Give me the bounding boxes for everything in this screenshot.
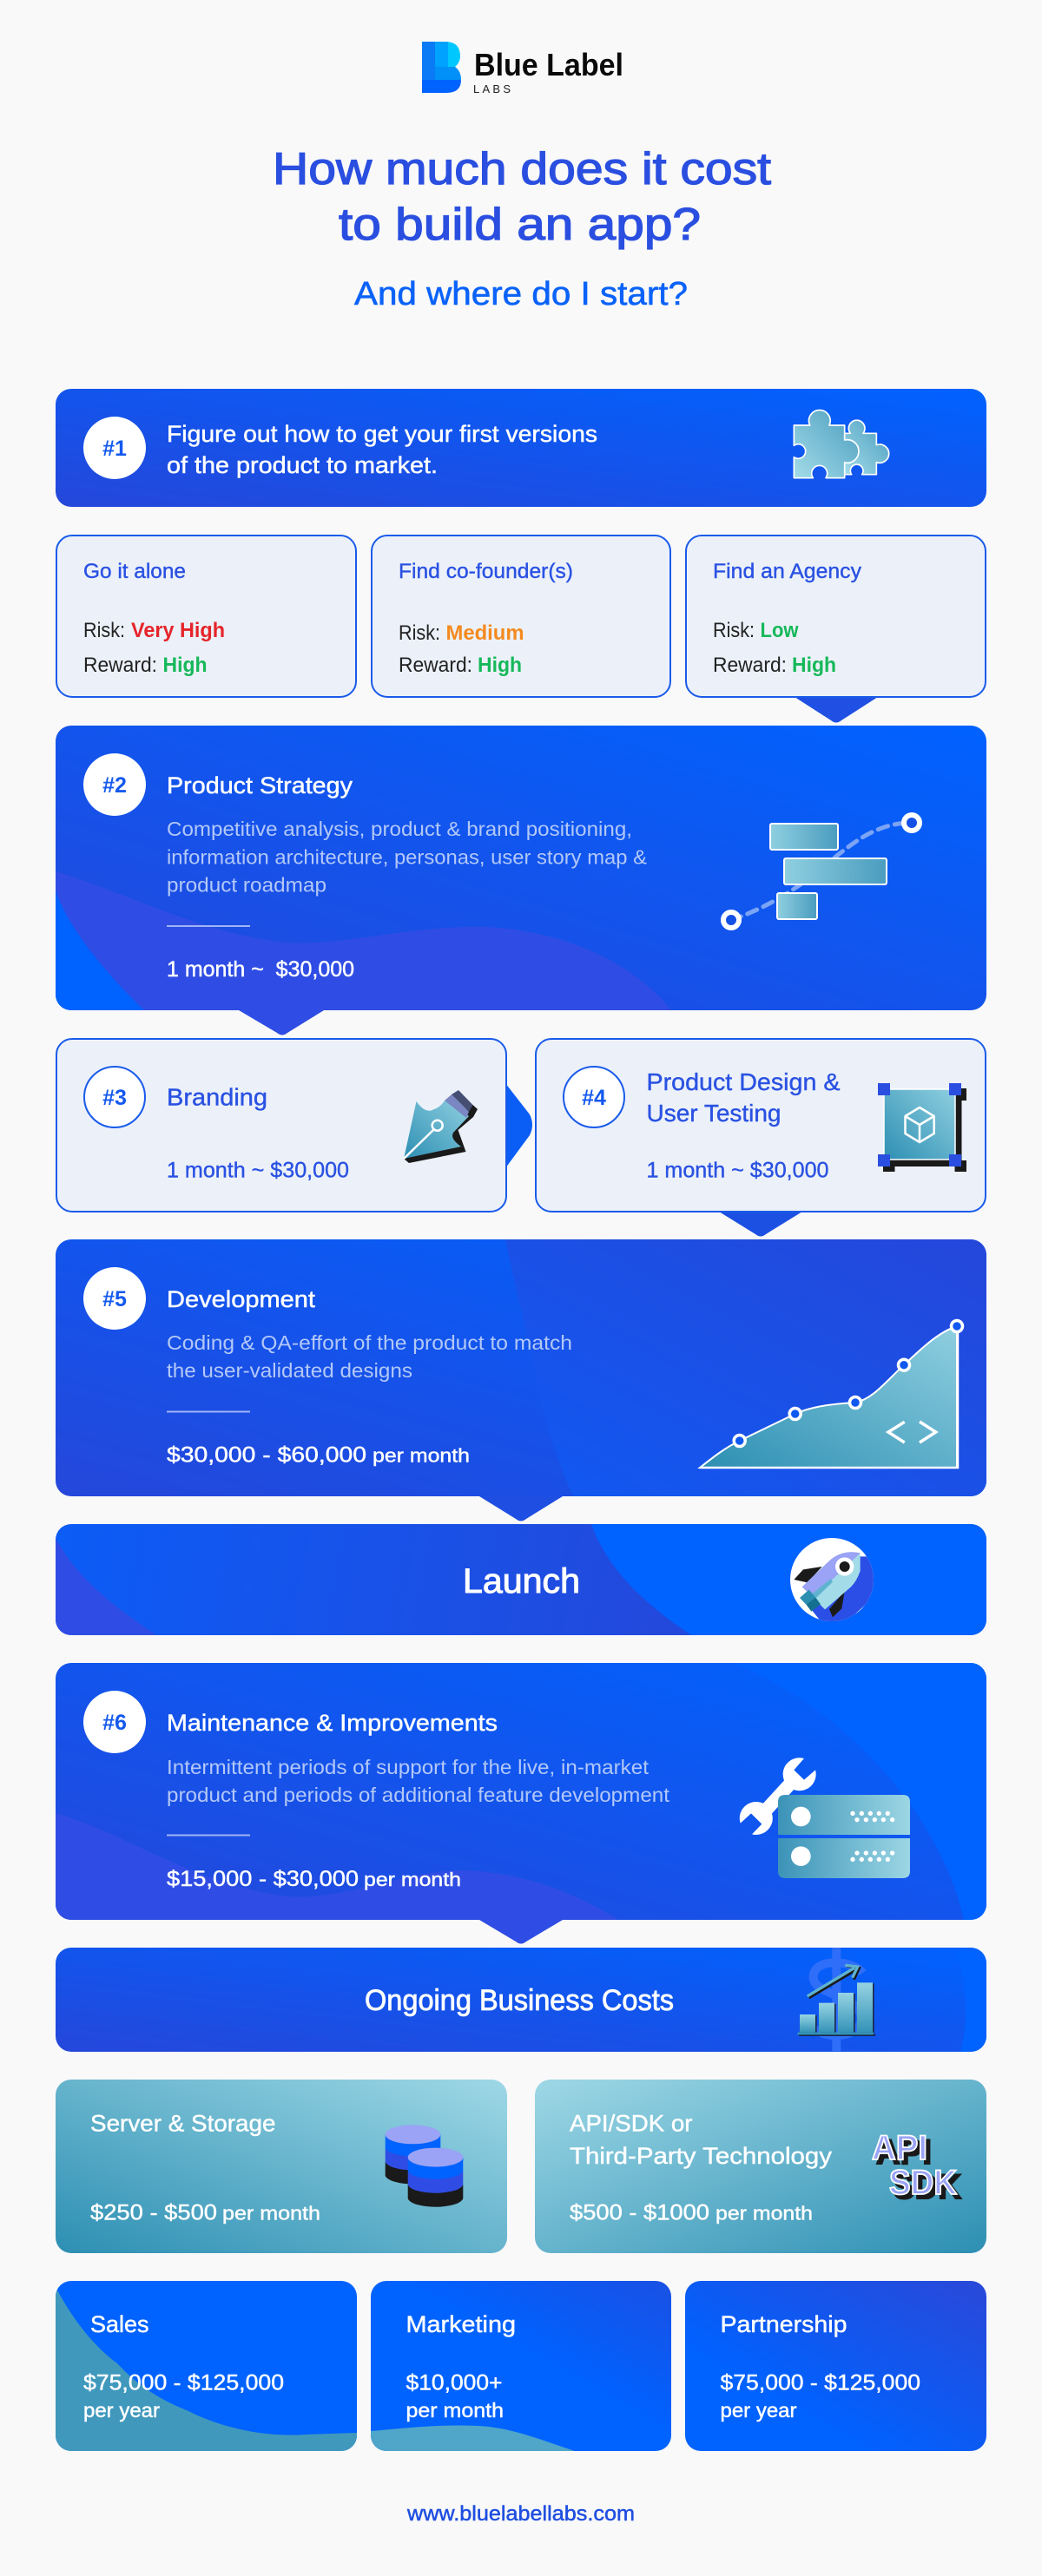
heading: sales: Sales — [90, 2311, 149, 2337]
text: price: $75,000 - $125,000 — [83, 2371, 284, 2395]
panel: partnership — [685, 2281, 986, 2451]
panel: find an agency: Reward: — [713, 654, 787, 677]
panel: find an agency: High — [792, 654, 836, 677]
panel: find co-founders: Reward: — [399, 654, 472, 677]
icon: pen nib — [404, 1090, 478, 1163]
text: price — [570, 2201, 813, 2225]
heading: API/SDK or third-party technology: Third-Party Technology — [570, 2143, 833, 2169]
text: description: product and periods of additional feature development — [167, 1784, 670, 1806]
text: price: per month — [406, 2399, 504, 2422]
footer url: www.bluelabellabs.com — [406, 2502, 635, 2526]
text: description: Coding & QA-effort of the product to match — [167, 1331, 572, 1354]
text: description — [167, 1331, 572, 1382]
heading: product design and user testing: Product Design & — [646, 1068, 841, 1095]
panel: step 1 — [56, 389, 986, 507]
icon: design artboard with cube — [878, 1083, 966, 1172]
icon: wrench and server — [740, 1758, 910, 1878]
heading: product strategy: Product Strategy — [167, 772, 353, 798]
text: price — [167, 1867, 461, 1891]
text: price — [90, 2201, 320, 2225]
panel: step 2 product strategy — [56, 726, 986, 1010]
badge: #5 — [83, 1267, 146, 1330]
title: How much does it cost — [273, 144, 772, 194]
icon: API SDK lettering: SDK — [894, 2168, 961, 2206]
badge: #1 — [83, 417, 146, 479]
heading: ongoing business costs: Ongoing Business Costs — [365, 1984, 674, 2017]
panel: go it alone: Go it alone — [83, 560, 186, 583]
panel: marketing — [371, 2281, 671, 2451]
title — [273, 144, 772, 250]
icon: API SDK lettering: SDK — [889, 2164, 957, 2202]
heading: product design and user testing — [646, 1068, 841, 1127]
panel: go it alone: Reward: — [83, 654, 157, 677]
text: price: $500 - $1000 — [570, 2201, 709, 2225]
panel: step 5 development — [56, 1239, 986, 1496]
text: price — [83, 2371, 284, 2422]
text: price — [406, 2371, 504, 2422]
panel: step 3 branding — [56, 1039, 506, 1212]
title: to build an app? — [339, 200, 701, 250]
panel: step 6 maintenance — [56, 1663, 986, 1920]
panel: sales — [56, 2281, 357, 2451]
badge: #4: #4 — [582, 1086, 606, 1110]
text: step 1: Figure out how to get your first versions — [167, 421, 597, 447]
text: price — [167, 1442, 470, 1467]
panel: launch — [56, 1524, 986, 1635]
heading: marketing: Marketing — [406, 2311, 516, 2337]
arrow: step 5 to launch — [479, 1496, 563, 1521]
text: step 1: of the product to market. — [167, 452, 438, 478]
text: price: 1 month ~ $30,000 — [167, 957, 354, 982]
text: price: $10,000+ — [406, 2371, 502, 2395]
heading: partnership: Partnership — [721, 2311, 847, 2337]
panel: step 4 product design — [536, 1039, 986, 1212]
text: price: per year — [83, 2399, 160, 2422]
text: description: product roadmap — [167, 873, 326, 896]
logo: Blue Label Labs — [422, 42, 623, 95]
heading: launch: Launch — [463, 1562, 580, 1600]
panel: find an agency: Low — [761, 619, 799, 642]
text: step 1 — [167, 421, 597, 478]
panel: go it alone: Risk: — [83, 619, 125, 642]
text: price: per month — [222, 2203, 320, 2224]
panel: ongoing business costs — [56, 1948, 986, 2052]
arrow: step 6 to ongoing costs — [479, 1920, 563, 1944]
text: description — [167, 818, 647, 896]
text: price: $15,000 - $30,000 — [167, 1867, 359, 1891]
text: price: per month — [364, 1869, 461, 1890]
text: description: the user-validated designs — [167, 1359, 412, 1382]
badge: #4 — [564, 1067, 624, 1127]
icon: API SDK lettering: API — [872, 2129, 927, 2167]
panel: find co-founders: High — [478, 654, 522, 677]
text: description: Intermittent periods of support for the live, in-market — [167, 1756, 650, 1778]
text: price: $250 - $500 — [90, 2201, 217, 2225]
icon: gantt roadmap — [723, 815, 920, 928]
badge: #3: #3 — [102, 1086, 127, 1110]
badge: #2 — [83, 753, 146, 816]
panel: find co-founders — [372, 536, 670, 697]
text: price: per year — [721, 2399, 797, 2422]
badge: #3 — [84, 1067, 145, 1127]
panel: find an agency: Risk: — [713, 619, 755, 642]
text: price: per month — [716, 2203, 813, 2224]
text: price — [721, 2371, 920, 2422]
badge: #1: #1 — [102, 437, 127, 461]
badge: #6: #6 — [102, 1711, 127, 1735]
icon: puzzle pieces — [794, 410, 889, 478]
text: description: Competitive analysis, product & brand positioning, — [167, 818, 632, 840]
panel: server and storage — [56, 2080, 507, 2253]
panel: find co-founders: Find co-founder(s) — [399, 560, 573, 583]
icon: database cylinders — [386, 2125, 463, 2207]
panel: go it alone: Very High — [131, 619, 225, 642]
text: price: $75,000 - $125,000 — [721, 2371, 920, 2395]
panel: find co-founders: Risk: — [399, 621, 440, 645]
logo: Blue Label Labs: LABS — [473, 82, 511, 95]
badge: #5: #5 — [102, 1287, 127, 1311]
heading: maintenance and improvements: Maintenance & Improvements — [167, 1710, 498, 1736]
panel: go it alone — [56, 536, 356, 697]
panel: find co-founders: Medium — [446, 621, 524, 645]
text: price: 1 month ~ $30,000 — [646, 1158, 828, 1182]
text: price: per month — [373, 1444, 470, 1467]
heading: server and storage: Server & Storage — [90, 2111, 276, 2137]
icon: growth bars with dollar sign — [797, 1948, 875, 2051]
chart: growth area — [700, 1321, 962, 1468]
text: description — [167, 1756, 670, 1806]
icon: API SDK lettering — [872, 2129, 961, 2206]
heading: product design and user testing: User Testing — [646, 1100, 782, 1127]
text: price: $30,000 - $60,000 — [167, 1442, 366, 1467]
badge: #2: #2 — [102, 773, 127, 798]
text: description: information architecture, personas, user story map & — [167, 845, 647, 868]
heading: API/SDK or third-party technology: API/SDK or — [570, 2111, 693, 2137]
panel: API and SDK — [535, 2080, 986, 2253]
heading: development: Development — [167, 1286, 316, 1312]
panel: find an agency: Find an Agency — [713, 560, 861, 583]
arrow: step 3 to step 4 — [505, 1083, 532, 1168]
heading: branding: Branding — [167, 1083, 267, 1111]
icon: rocket — [790, 1538, 874, 1621]
arrow: step 4 to step 5 — [719, 1212, 802, 1236]
badge: #6 — [83, 1691, 146, 1753]
panel: go it alone: High — [163, 654, 207, 677]
arrow: agency to step 2 — [795, 697, 878, 722]
icon: API SDK lettering: API — [876, 2133, 932, 2172]
panel: find an agency — [686, 536, 986, 697]
arrow: step 2 to step 3 — [239, 1010, 324, 1035]
heading: API/SDK or third-party technology — [570, 2111, 833, 2169]
text: price: 1 month ~ $30,000 — [167, 1158, 349, 1182]
subtitle: And where do I start? — [354, 276, 688, 312]
logo: Blue Label Labs: Blue Label — [474, 47, 623, 82]
